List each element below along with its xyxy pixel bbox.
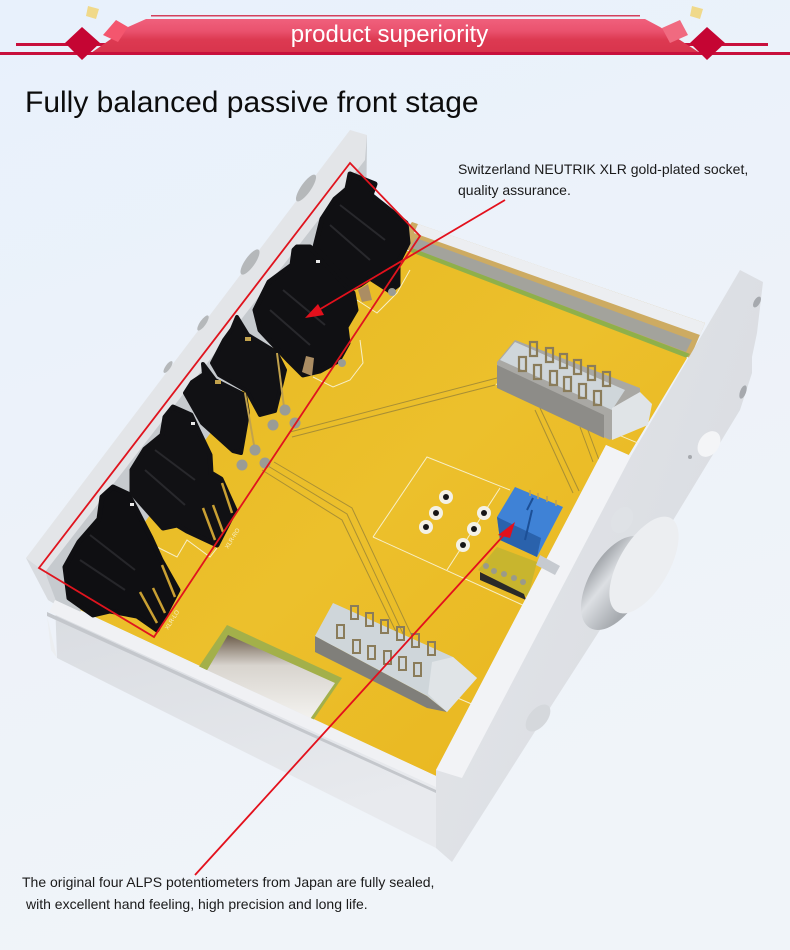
red highlight frame around XLR sockets [39,163,420,637]
connector 5 [255,247,356,376]
board labels [165,527,242,631]
main heading: Fully balanced passive front stage [25,86,479,119]
front panel [436,270,763,862]
rear panel [26,130,367,612]
connector 3 [185,364,254,453]
yellow circuit board [80,230,687,776]
callout: NEUTRIK XLR socket: quality assurance. [458,182,571,198]
solder pads [236,404,300,470]
mounting pads [419,490,491,552]
inner back wall and rail [395,222,705,358]
rotary switch, upper [497,340,652,440]
panel screw holes [688,295,763,459]
volume knob [567,503,693,642]
banner title: product superiority [291,21,488,48]
rear sockets protruding over panel edge [162,172,319,374]
silkscreen outlines [105,270,645,716]
callout: ALPS potentiometers [22,874,434,912]
board labels: XLR-RO [225,527,242,550]
connector 4 [212,317,285,415]
callout: ALPS potentiometers: with excellent hand feeling, high precision and long life. [25,896,368,912]
connector 2 [132,407,235,545]
callout: NEUTRIK XLR socket: Switzerland NEUTRIK XLR gold-plated socket, [458,161,748,177]
lower toggle [521,700,555,736]
board labels: XLR-LO [165,609,181,631]
banner ribbon [0,15,790,55]
blue ALPS potentiometer [497,487,563,557]
board cutout [198,625,342,722]
small toggle [693,427,725,461]
rotary switch, lower [315,603,477,712]
arrow: XLR socket callout [305,200,505,318]
product photo: open amplifier chassis [26,130,763,862]
callout: ALPS potentiometers: The original four ALPS potentiometers from Japan are fully sealed, [22,874,434,890]
arrow: ALPS potentiometer callout [195,522,515,875]
bottom side panel [47,600,436,848]
decorative diamonds [65,6,725,60]
small board under potentiometer [478,547,537,600]
XLR connectors [65,174,408,630]
header banner [0,6,790,60]
connector 1 [65,487,178,630]
callout: NEUTRIK XLR socket [458,161,748,198]
traces [262,378,599,640]
connector 6 [315,174,408,302]
